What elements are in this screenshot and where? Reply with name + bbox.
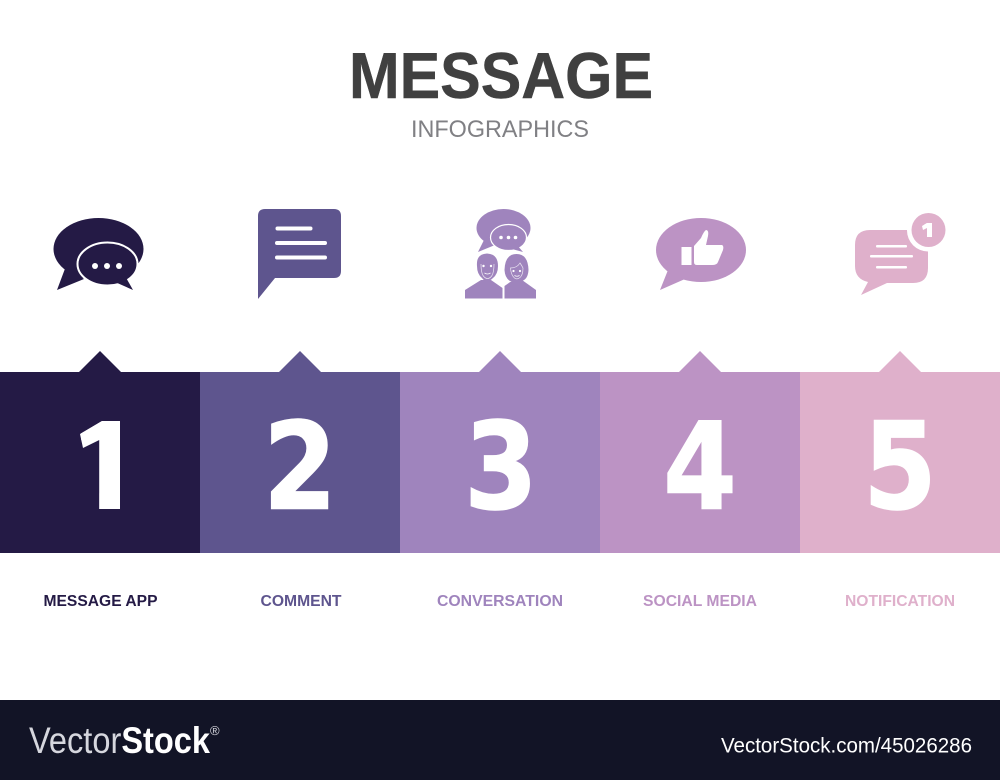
label: notification: NOTIFICATION bbox=[845, 593, 955, 610]
icon: notification bubble with badge bbox=[855, 210, 949, 295]
panel 4 bbox=[600, 351, 800, 553]
panel 3 bbox=[400, 351, 600, 553]
panel 3: 3 bbox=[464, 397, 538, 537]
subtitle: INFOGRAPHICS bbox=[411, 116, 589, 143]
panel 1 bbox=[0, 351, 200, 553]
icon: social media like bubble bbox=[656, 218, 746, 290]
panel 1: 1 bbox=[69, 396, 143, 538]
panel 5 bbox=[800, 351, 1000, 553]
label: message app: MESSAGE APP bbox=[44, 593, 158, 610]
footer bar bbox=[0, 700, 1000, 780]
footer registered mark: ® bbox=[210, 723, 220, 738]
label: conversation: CONVERSATION bbox=[437, 593, 563, 610]
label: comment: COMMENT bbox=[260, 593, 342, 610]
man bbox=[465, 254, 502, 298]
title: MESSAGE bbox=[349, 39, 653, 112]
label: social media: SOCIAL MEDIA bbox=[643, 593, 757, 610]
footer image id: VectorStock.com/45026286 bbox=[721, 734, 972, 758]
icon: message app bubbles bbox=[54, 218, 144, 290]
panel 5: 5 bbox=[863, 397, 937, 537]
panel 4: 4 bbox=[663, 397, 737, 537]
woman bbox=[504, 254, 536, 298]
footer logo: VectorStock bbox=[29, 720, 210, 761]
icon: conversation between two people bbox=[465, 209, 536, 298]
panel 2 bbox=[200, 351, 400, 553]
icon: notification bubble with badge: 1 bbox=[922, 218, 935, 242]
icon: comment bubble bbox=[258, 209, 341, 299]
panel 2: 2 bbox=[263, 397, 337, 537]
